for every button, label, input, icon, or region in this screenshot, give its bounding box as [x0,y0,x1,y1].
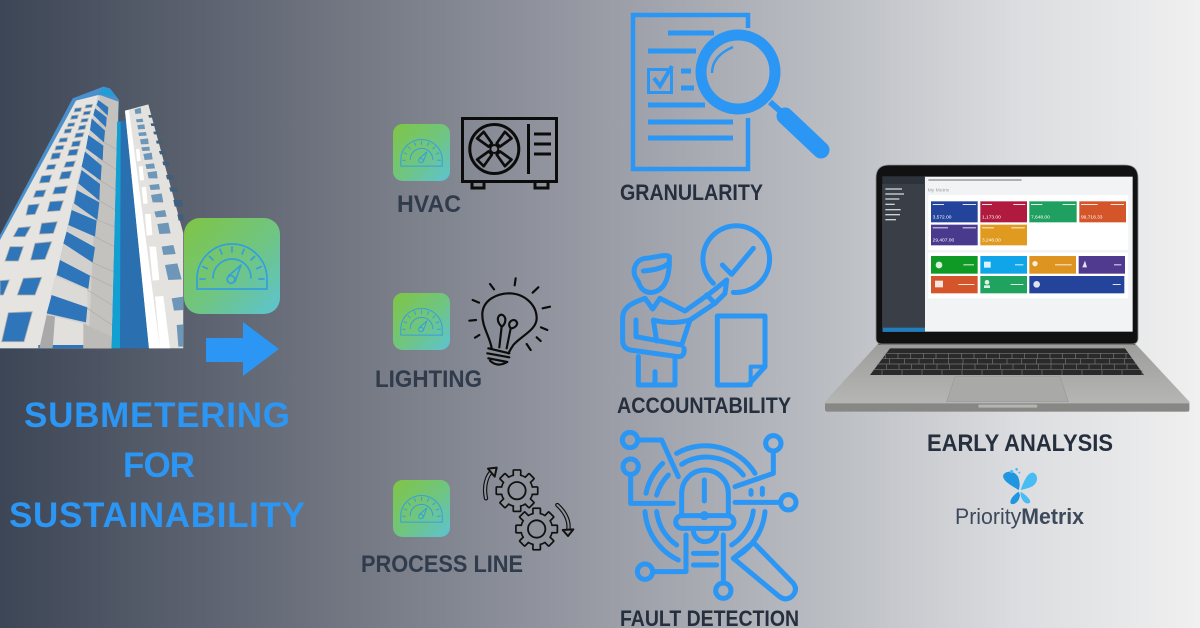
icon: butterfly mark [1003,468,1037,504]
dashboard screen: 29,407.00 [933,238,954,244]
title: submetering for sustainability [9,396,305,535]
dashboard screen: 3,246.00 [982,238,1001,244]
title: submetering for sustainability: SUSTAINABILITY [9,496,305,535]
dashboard screen: 99,718.33 [1081,215,1103,221]
label: accountability: ACCOUNTABILITY [617,393,791,418]
dashboard screen: My Metrix [928,187,950,193]
dashboard screen: 1,173.00 [982,215,1001,221]
dashboard screen: 3,572.00 [933,215,952,221]
icon: light bulb [469,278,550,365]
label: process line: PROCESS LINE [361,551,523,578]
title: submetering for sustainability: SUBMETERING [24,396,290,435]
item: lighting submeter [375,278,550,393]
dashboard screen: 7,648.00 [1031,215,1050,221]
item: process line submeter [361,468,573,578]
icon: HVAC outdoor unit [462,118,556,188]
benefit: granularity [620,15,821,205]
dashboard screen [883,177,1133,332]
icon: person presenting with check and document [623,226,770,385]
right tower [125,104,183,348]
arrow: building to submeters [206,322,279,376]
icon: large submeter tile [184,218,280,314]
central blue shaft [112,120,149,348]
icon: meter tile [393,480,450,537]
icon: alarm bell with circuit nodes and magnifier [622,432,796,599]
left tower body [0,87,119,348]
label: lighting: LIGHTING [375,366,482,393]
label: granularity: GRANULARITY [620,180,763,205]
label: HVAC: HVAC [397,191,461,218]
laptop base and keyboard [825,342,1189,412]
title: submetering for sustainability: FOR [123,446,195,485]
wordmark: PriorityMetrix [955,504,1085,529]
benefit: accountability [617,226,791,418]
screen bezel [876,165,1138,344]
side balconies [47,100,108,322]
icon: meter tile [393,124,450,181]
laptop with dashboard [825,165,1189,412]
illustration: high-rise building [0,87,183,348]
front windows [0,104,93,342]
label: early analysis: EARLY ANALYSIS [927,430,1113,457]
icon: gears with rotation arrows [485,468,573,550]
benefit: fault detection [620,432,799,628]
logo: PriorityMetrix [955,468,1085,529]
icon: meter tile [393,293,450,350]
item: HVAC submeter [393,118,556,218]
icon: document with magnifier [633,15,821,169]
